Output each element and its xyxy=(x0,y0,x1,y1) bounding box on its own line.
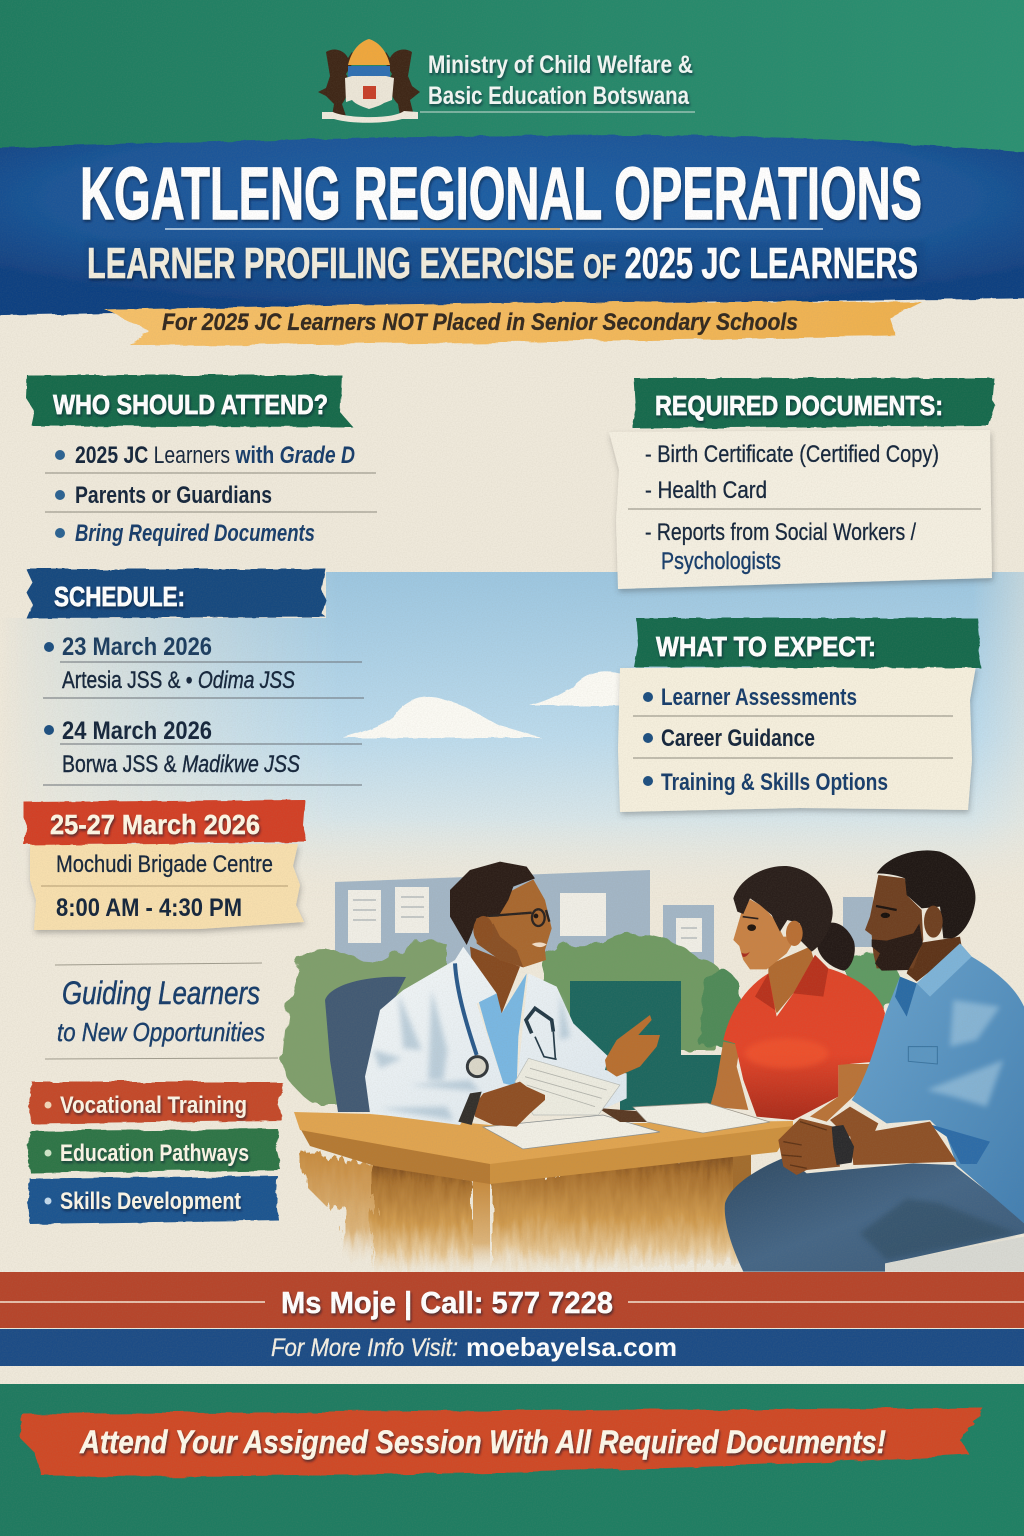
stethoscope xyxy=(455,963,557,1077)
neck xyxy=(470,947,520,1013)
schedule dates: Borwa JSS & Madikwe JSS xyxy=(62,751,300,778)
ministry name xyxy=(428,51,693,110)
lion supporters xyxy=(318,50,356,116)
expect card xyxy=(618,666,976,812)
background buildings xyxy=(335,870,873,975)
blue title banner xyxy=(0,135,1024,316)
neck xyxy=(768,947,815,1013)
clasped hands xyxy=(778,1118,840,1175)
orange strip text: For 2025 JC Learners NOT Placed in Senior Secondary Schools xyxy=(162,309,798,336)
expect list: Training & Skills Options xyxy=(661,769,888,796)
forearm xyxy=(850,1122,957,1165)
subtitle: LEARNER PROFILING EXERCISE OF 2025 JC LEARNERS xyxy=(87,239,918,288)
blue website band xyxy=(0,1329,1024,1366)
desk left splatter xyxy=(296,1150,373,1262)
heading banner: who should attend xyxy=(26,375,353,427)
blue shirt xyxy=(852,943,1024,1223)
bar: skills development xyxy=(27,1176,279,1224)
woman's face xyxy=(733,899,797,969)
hair xyxy=(877,850,975,938)
heading banner: schedule: SCHEDULE: xyxy=(54,581,185,612)
head xyxy=(475,879,552,967)
footer: contact strip xyxy=(0,1272,1024,1366)
panel: venue and time xyxy=(24,800,307,930)
tagline: to New Opportunities xyxy=(57,1017,265,1047)
documents card xyxy=(609,430,992,589)
desk base xyxy=(294,1112,793,1274)
hair xyxy=(450,862,535,945)
ministry name: Ministry of Child Welfare & xyxy=(428,51,693,79)
desk under-panels xyxy=(373,1160,473,1274)
schedule dates: Artesia JSS & • Odima JSS xyxy=(62,667,295,694)
teal cabinet xyxy=(570,981,722,1110)
orange strip xyxy=(105,301,922,345)
woman's features xyxy=(747,924,756,931)
ministry crest xyxy=(318,39,420,123)
time text: 8:00 AM - 4:30 PM xyxy=(56,894,242,922)
ribbon xyxy=(322,111,418,123)
desk legs xyxy=(473,1180,490,1270)
sky backdrop xyxy=(22,572,1024,854)
schedule dates: 23 March 2026 xyxy=(62,633,212,661)
facial features xyxy=(534,914,538,918)
illustration: consultation scene xyxy=(282,850,1024,1274)
attendee list: 2025 JC Learners with Grade D xyxy=(75,442,355,469)
expect list xyxy=(633,684,953,796)
panel: who should attend xyxy=(26,375,377,547)
held paper and doctor's hands xyxy=(458,1015,660,1127)
closing call to action banner xyxy=(20,1408,984,1476)
top green header xyxy=(0,0,1024,160)
shield body xyxy=(345,76,394,109)
attendee list: Bring Required Documents xyxy=(75,520,315,547)
closing call to action banner: Attend Your Assigned Session With All Required Documents! xyxy=(79,1424,886,1460)
attendee list xyxy=(45,442,377,547)
rolled cuff xyxy=(927,1123,990,1164)
bar: education pathways xyxy=(28,1129,281,1173)
red contact band xyxy=(0,1272,1024,1328)
holding hand xyxy=(473,1082,545,1127)
contact text: Ms Moje | Call: 577 7228 xyxy=(281,1285,613,1320)
man xyxy=(725,850,1024,1272)
held paper xyxy=(515,1058,620,1115)
pathway bars xyxy=(27,1082,283,1224)
attendee list: Parents or Guardians xyxy=(75,482,272,509)
date banner: 25-27 March 2026 xyxy=(50,809,260,840)
panel: what to expect xyxy=(618,618,981,812)
documents list xyxy=(628,441,981,575)
ponytail xyxy=(817,923,855,971)
website text xyxy=(271,1332,677,1362)
tagline xyxy=(45,963,278,1059)
face xyxy=(865,875,923,968)
motto band xyxy=(348,66,390,77)
white seat xyxy=(885,1237,1024,1272)
clouds xyxy=(343,672,640,738)
schedule dates: 24 March 2026 xyxy=(62,717,212,745)
desk top xyxy=(294,1112,793,1164)
table papers xyxy=(483,1103,770,1149)
trees xyxy=(282,934,905,1105)
woman's hair xyxy=(733,866,833,952)
venue text: Mochudi Brigade Centre xyxy=(56,851,273,878)
heading banner: required documents xyxy=(632,378,996,428)
bar: skills development: Skills Development xyxy=(60,1188,241,1215)
jeans xyxy=(725,1157,1024,1272)
neck xyxy=(907,937,962,982)
coat folds xyxy=(373,990,570,1120)
far arm xyxy=(830,1107,878,1137)
man's features xyxy=(881,913,890,918)
expect list: Career Guidance xyxy=(661,725,815,752)
tagline: Guiding Learners xyxy=(62,975,260,1011)
schedule dates xyxy=(43,633,364,785)
documents list: - Reports from Social Workers / xyxy=(645,519,916,546)
bar: vocational training xyxy=(28,1082,283,1124)
chair xyxy=(325,977,406,1112)
documents list: Psychologists xyxy=(661,548,781,575)
venue card xyxy=(30,844,304,930)
doctor xyxy=(365,862,627,1125)
panel: required documents xyxy=(609,378,996,589)
ministry name: Basic Education Botswana xyxy=(428,82,690,110)
beard xyxy=(872,923,923,971)
shirt xyxy=(478,973,527,1087)
woman xyxy=(710,866,885,1122)
website text: For More Info Visit: xyxy=(271,1334,458,1362)
heading banner: who should attend: WHO SHOULD ATTEND? xyxy=(53,389,328,420)
desk front edge xyxy=(490,1125,793,1184)
bottom green band xyxy=(0,1384,1024,1536)
expect list: Learner Assessments xyxy=(661,684,857,711)
panel: schedule xyxy=(26,569,364,785)
shield dome xyxy=(348,39,390,65)
woman's arms xyxy=(710,1042,748,1110)
watch xyxy=(832,1125,854,1165)
glasses xyxy=(488,909,549,926)
date banner xyxy=(24,800,307,845)
heading banner: required documents: REQUIRED DOCUMENTS: xyxy=(655,390,943,421)
heading banner: schedule xyxy=(26,569,326,618)
white coat xyxy=(365,947,627,1125)
heading banner: what to expect: WHAT TO EXPECT: xyxy=(656,631,876,662)
red shirt xyxy=(723,955,885,1120)
documents list: - Birth Certificate (Certified Copy) xyxy=(645,441,939,468)
heading banner: what to expect xyxy=(634,618,981,668)
website text: moebayelsa.com xyxy=(466,1332,677,1362)
documents list: - Health Card xyxy=(645,477,767,504)
bar: education pathways: Education Pathways xyxy=(60,1140,249,1167)
bar: vocational training: Vocational Training xyxy=(60,1092,247,1119)
gesturing hand xyxy=(605,1015,660,1077)
